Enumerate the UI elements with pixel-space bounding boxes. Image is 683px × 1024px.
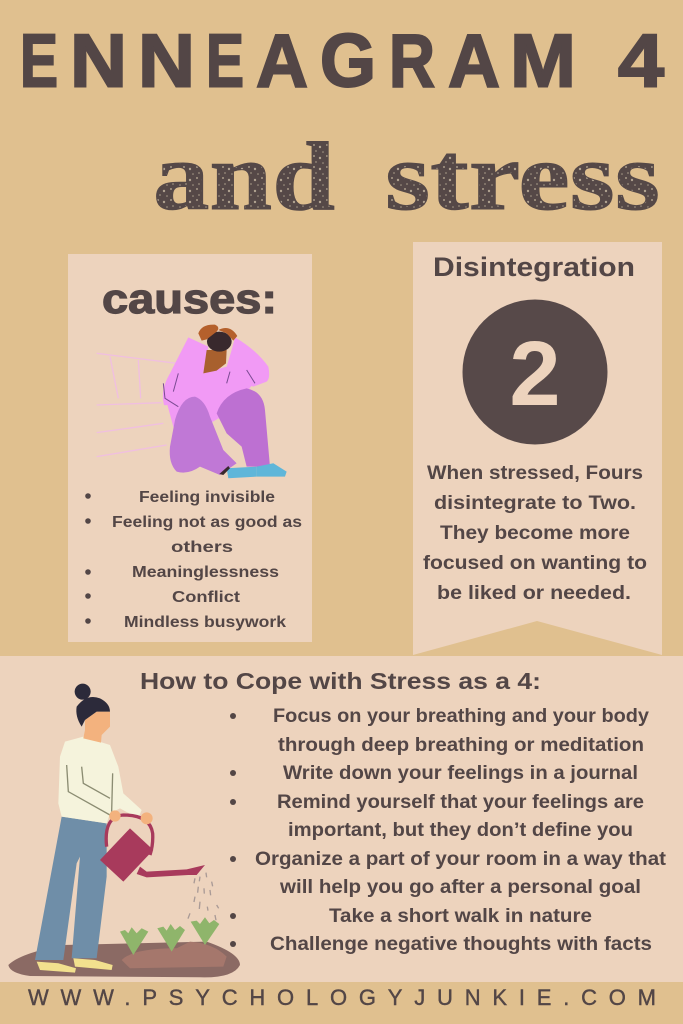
cope list: Remind yourself that your feelings are (277, 791, 644, 813)
causes list: Meaninglessness (132, 564, 279, 581)
hands (109, 810, 121, 822)
watering can (106, 815, 153, 855)
disintegration description: be liked or needed. (437, 582, 631, 604)
subtitle: and stress: and (153, 123, 335, 231)
cope list: Take a short walk in nature (329, 905, 592, 927)
hair (207, 332, 232, 352)
disintegration description: When stressed, Fours (427, 462, 643, 484)
disintegration heading: Disintegration (433, 252, 635, 282)
cope list: Write down your feelings in a journal (283, 762, 638, 784)
right arm (227, 337, 269, 387)
left leg (170, 397, 237, 475)
title: ENNEAGRAM 4: G (320, 18, 376, 102)
disintegration description: They become more (440, 522, 630, 544)
shoes (227, 467, 257, 478)
panel: causes (68, 254, 312, 642)
footer url: WWW.PSYCHOLOGYJUNKIE.COM (28, 985, 656, 1010)
plants (120, 917, 219, 955)
head (83, 712, 110, 743)
torso (163, 367, 253, 437)
title: ENNEAGRAM 4: E (20, 18, 58, 102)
ground (8, 942, 240, 977)
number badge 2: 2 (509, 323, 561, 425)
right leg (217, 388, 270, 467)
subtitle: and stress (153, 123, 660, 231)
disintegration description (423, 462, 647, 604)
causes list: others (171, 539, 233, 556)
face (203, 350, 227, 373)
title: ENNEAGRAM 4: N (138, 18, 195, 102)
panel: how to cope (0, 656, 683, 982)
causes list: Mindless busywork (124, 614, 286, 631)
shoes (37, 962, 76, 973)
illustration: stressed person sitting (97, 325, 287, 478)
disintegration description: focused on wanting to (423, 552, 647, 574)
cope list: Challenge negative thoughts with facts (270, 933, 652, 955)
disintegration description: disintegrate to Two. (434, 492, 636, 514)
title: ENNEAGRAM 4: N (70, 18, 127, 102)
hands (198, 325, 218, 341)
panel: disintegration ribbon (413, 242, 662, 655)
title: ENNEAGRAM 4: A (256, 18, 308, 102)
sweater (58, 737, 142, 823)
title: ENNEAGRAM 4: M (510, 18, 576, 102)
cope list: Organize a part of your room in a way that (255, 848, 667, 870)
illustration: woman watering plants (8, 684, 240, 977)
cope list: important, but they don’t define you (288, 819, 633, 841)
cope list (230, 705, 667, 955)
title: ENNEAGRAM 4: R (389, 18, 435, 102)
left arm (163, 337, 208, 405)
causes heading: causes: (102, 275, 277, 322)
title: ENNEAGRAM 4: 4 (618, 18, 664, 102)
cope list: will help you go after a personal goal (279, 876, 641, 898)
causes list: Feeling invisible (139, 489, 275, 506)
number badge 2 (462, 300, 608, 444)
cope list: Focus on your breathing and your body (273, 705, 649, 727)
title: ENNEAGRAM 4: A (448, 18, 500, 102)
water (188, 873, 219, 920)
cope heading: How to Cope with Stress as a 4: (140, 668, 541, 694)
subtitle: and stress: stress (385, 123, 660, 231)
title: ENNEAGRAM 4: E (206, 18, 244, 102)
jeans (35, 817, 107, 960)
causes list (85, 489, 302, 631)
cope list: through deep breathing or meditation (278, 734, 644, 756)
causes list: Feeling not as good as (112, 514, 302, 531)
causes list: Conflict (172, 589, 241, 606)
